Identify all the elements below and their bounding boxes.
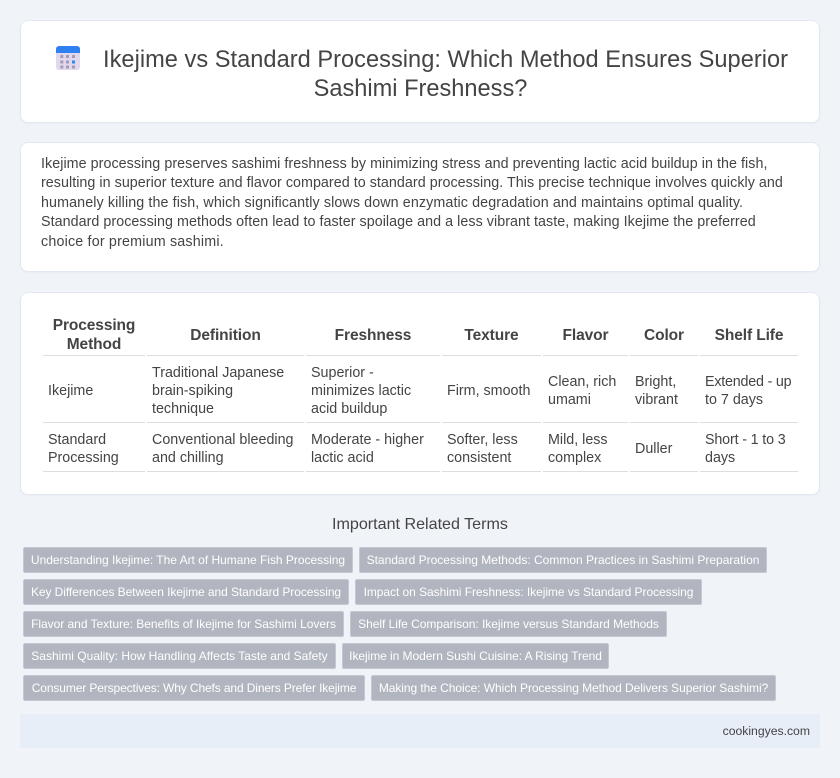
row: Standard Processing: consistent bbox=[447, 450, 511, 466]
related terms tags: Sashimi Quality: How Handling Affects Taste and Safety bbox=[31, 649, 328, 663]
row: Standard Processing: Standard bbox=[48, 432, 106, 448]
intro text: Standard processing methods often lead to faster spoilage and a less vibrant taste, making Ikejime the preferred bbox=[41, 214, 756, 230]
row: Ikejime: Traditional Japanese bbox=[152, 365, 284, 381]
row: Standard Processing: lactic acid bbox=[311, 450, 374, 466]
table header: Shelf Life bbox=[715, 327, 783, 344]
table header: Flavor bbox=[563, 327, 608, 344]
panel: title header bbox=[20, 20, 820, 123]
table header: Texture bbox=[464, 327, 519, 344]
row: Ikejime: Firm, smooth bbox=[447, 383, 530, 399]
row: Standard Processing: Moderate - higher bbox=[311, 432, 424, 448]
intro text: choice for premium sashimi. bbox=[41, 234, 224, 250]
row: Standard Processing: Softer, less bbox=[447, 432, 518, 448]
row: Ikejime: Ikejime bbox=[48, 383, 93, 399]
row: Ikejime: to 7 days bbox=[705, 392, 763, 408]
panel: introduction bbox=[20, 142, 820, 272]
row: Ikejime: Superior - bbox=[311, 365, 374, 381]
table header: Freshness bbox=[335, 327, 411, 344]
row: Standard Processing: days bbox=[705, 450, 735, 466]
related terms tags: Standard Processing Methods: Common Practices in Sashimi Preparation bbox=[367, 553, 759, 567]
icon: calendar bbox=[56, 46, 80, 70]
title: Ikejime vs Standard Processing: Which Method Ensures Superior bbox=[103, 47, 788, 73]
related terms tags: Key Differences Between Ikejime and Standard Processing bbox=[31, 585, 341, 599]
row: Ikejime: vibrant bbox=[635, 392, 678, 408]
table header: Method bbox=[67, 336, 121, 353]
table header bbox=[53, 317, 783, 353]
row: Ikejime: acid buildup bbox=[311, 401, 387, 417]
related terms tags: Ikejime in Modern Sushi Cuisine: A Rising Trend bbox=[349, 649, 602, 663]
row: Ikejime: brain-spiking bbox=[152, 383, 233, 399]
intro text: resulting in superior texture and flavor compared to standard processing. This precise technique involves quickly and bbox=[41, 175, 783, 191]
row: Standard Processing: Short - 1 to 3 bbox=[705, 432, 786, 448]
table header: Processing bbox=[53, 317, 135, 334]
intro text bbox=[41, 156, 783, 250]
row: Ikejime: Bright, bbox=[635, 374, 676, 390]
row: Standard Processing: Duller bbox=[635, 441, 672, 457]
related terms tags: Impact on Sashimi Freshness: Ikejime vs Standard Processing bbox=[364, 585, 693, 599]
intro text: Ikejime processing preserves sashimi freshness by minimizing stress and preventing lactic acid buildup in the fish, bbox=[41, 156, 767, 172]
row: Ikejime: minimizes lactic bbox=[311, 383, 411, 399]
title bbox=[103, 47, 788, 102]
table header: Color bbox=[644, 327, 684, 344]
row: Standard Processing bbox=[43, 422, 798, 472]
footer bbox=[20, 714, 820, 748]
intro text: humanely killing the fish, which significantly slows down enzymatic degradation and maintains optimal quality. bbox=[41, 195, 743, 211]
panel: comparison table bbox=[20, 292, 820, 495]
row: Ikejime: technique bbox=[152, 401, 214, 417]
row: Standard Processing: Processing bbox=[48, 450, 119, 466]
related terms tags: Shelf Life Comparison: Ikejime versus Standard Methods bbox=[358, 617, 659, 631]
heading: related terms: Important Related Terms bbox=[332, 515, 508, 533]
row: Ikejime: Clean, rich bbox=[548, 374, 616, 390]
related terms tags bbox=[23, 547, 776, 701]
related terms tags: Understanding Ikejime: The Art of Humane Fish Processing bbox=[31, 553, 345, 567]
row: Ikejime bbox=[43, 355, 798, 417]
footer source: cookingyes.com bbox=[723, 724, 810, 738]
title: Sashimi Freshness? bbox=[314, 76, 527, 102]
related terms tags: Making the Choice: Which Processing Method Delivers Superior Sashimi? bbox=[379, 681, 768, 695]
row: Ikejime: Extended - up bbox=[705, 374, 791, 390]
table header: Definition bbox=[190, 327, 261, 344]
row: Standard Processing: complex bbox=[548, 450, 601, 466]
related terms tags: Flavor and Texture: Benefits of Ikejime for Sashimi Lovers bbox=[31, 617, 336, 631]
row: Ikejime: umami bbox=[548, 392, 591, 408]
row: Standard Processing: Mild, less bbox=[548, 432, 608, 448]
row: Standard Processing: and chilling bbox=[152, 450, 224, 466]
row: Standard Processing: Conventional bleeding bbox=[152, 432, 294, 448]
related terms tags: Consumer Perspectives: Why Chefs and Diners Prefer Ikejime bbox=[32, 681, 356, 695]
